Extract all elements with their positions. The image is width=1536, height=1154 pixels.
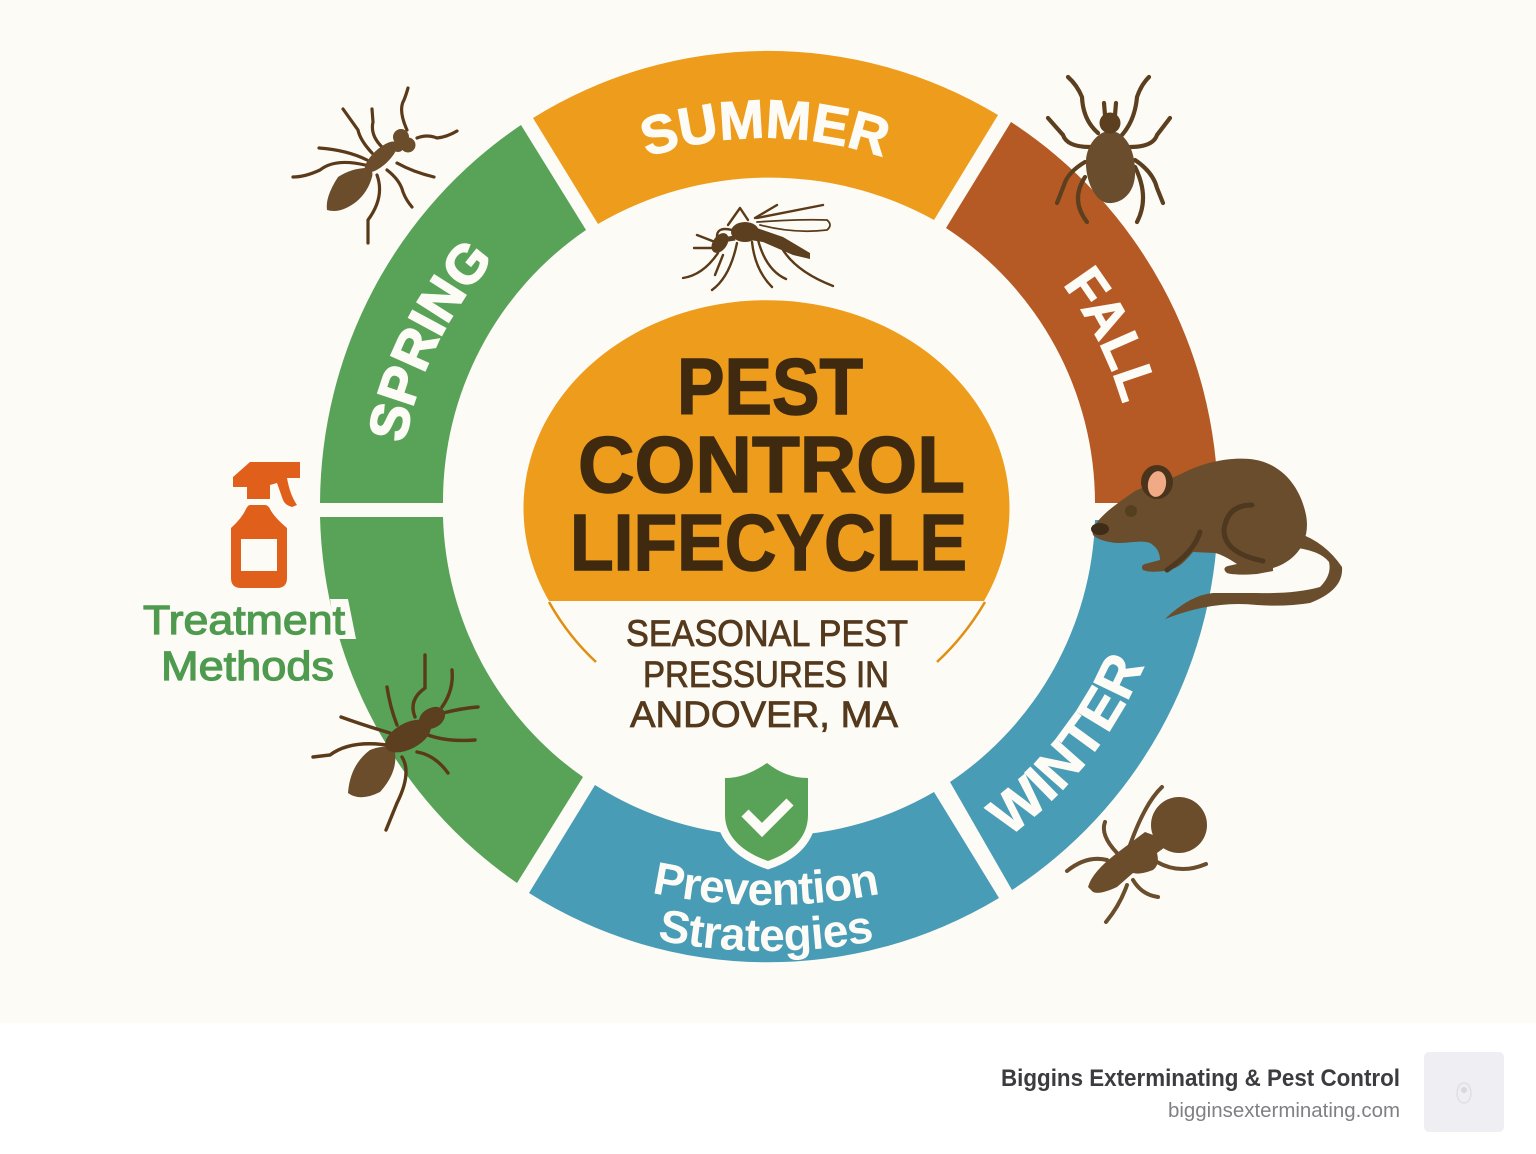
icon: ant top left: [293, 88, 457, 243]
segment: spring: SPRING: [370, 243, 488, 441]
icon: ant lower right: [1067, 787, 1207, 922]
segment: spring: [320, 125, 586, 503]
segment: treatment green: [320, 517, 583, 883]
icon: ant lower left: [313, 655, 478, 830]
subtitle: [626, 613, 908, 735]
label: treatment methods: Treatment: [143, 597, 346, 643]
footer logo: [1424, 1052, 1504, 1132]
seasonal ring: [320, 50, 1216, 962]
icon: shield: [725, 763, 808, 861]
title: LIFECYCLE: [570, 498, 967, 587]
segment: winter: [950, 520, 1216, 890]
label patch: treatment: [330, 599, 356, 639]
icon: mosquito: [683, 205, 833, 290]
title: [570, 342, 967, 587]
footer brand name: Biggins Exterminating & Pest Control: [1001, 1065, 1400, 1092]
segment: summer: SUMMER: [642, 100, 888, 158]
footer url: bigginsexterminating.com: [1168, 1100, 1400, 1122]
subtitle: PRESSURES IN: [643, 654, 889, 695]
label: treatment methods: [143, 597, 346, 689]
title: PEST: [677, 342, 863, 431]
icon: spray bottle: [231, 462, 300, 588]
footer band: [0, 1023, 1536, 1154]
subtitle: ANDOVER, MA: [630, 694, 898, 735]
segment: winter: WINTER: [984, 655, 1145, 832]
subtitle: SEASONAL PEST: [626, 613, 908, 654]
segment: summer: [533, 50, 998, 224]
segment: prevention strategies: Prevention: [654, 862, 878, 906]
segment: fall: FALL: [1064, 264, 1152, 404]
icon: tick top right: [1048, 77, 1170, 222]
label: treatment methods: Methods: [161, 643, 334, 689]
segment: fall: [946, 122, 1216, 503]
orange badge: [524, 300, 1010, 601]
segment: prevention strategies: [529, 785, 999, 962]
badge lower arcs: [549, 602, 985, 662]
icon: rat: [1091, 459, 1342, 619]
segment: prevention strategies: Strategies: [660, 910, 872, 960]
title: CONTROL: [578, 420, 965, 509]
centre title badge: [524, 300, 1010, 735]
